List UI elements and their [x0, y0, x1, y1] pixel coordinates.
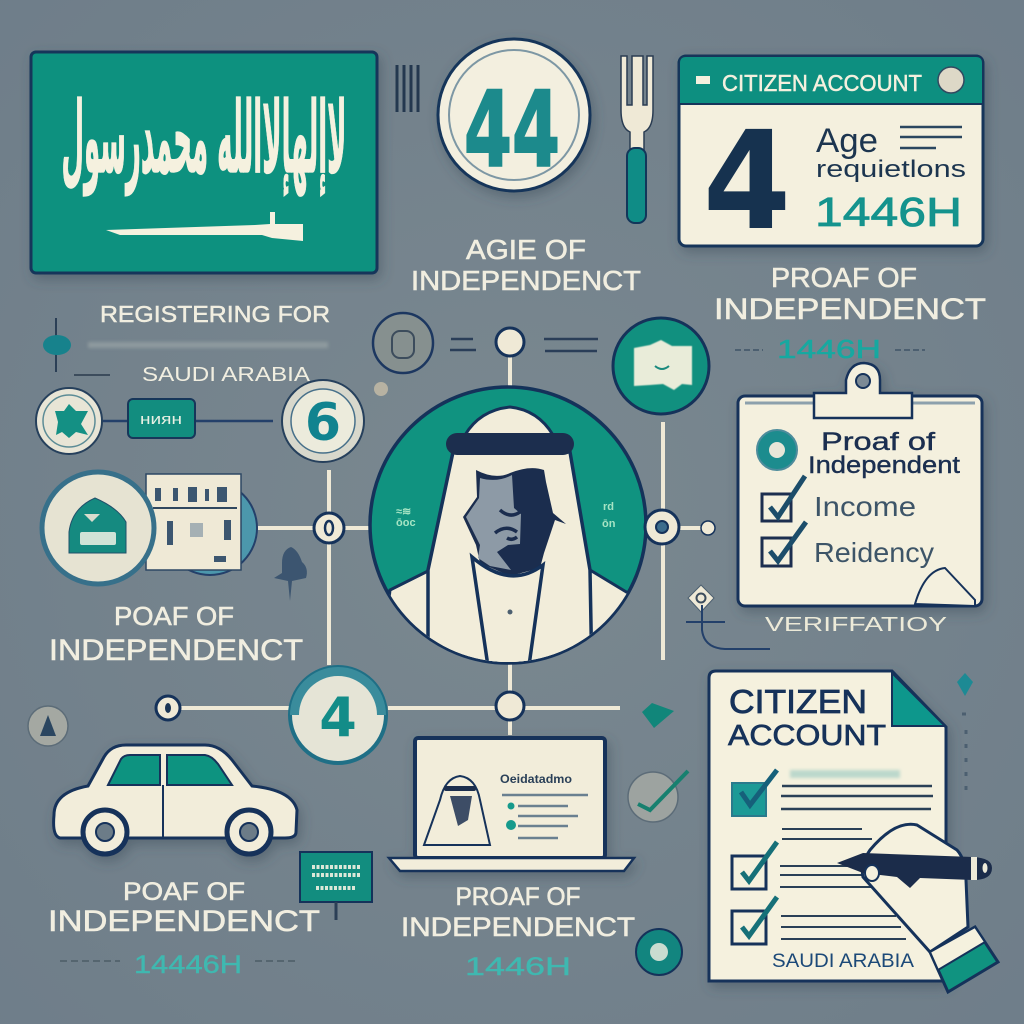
- side script: ōoc: [396, 517, 416, 529]
- panel: citizen account card: requietlons: [816, 156, 966, 183]
- icon: fork: [397, 56, 653, 223]
- heading: proof of independent bottom left: INDEPENDENCT: [48, 905, 320, 938]
- icon: clock check: [628, 703, 688, 822]
- checkbox: residency: [762, 538, 791, 566]
- heading: proof of independent bottom left: [48, 878, 320, 938]
- heading: proof of independent bottom center: PROAF OF: [456, 883, 580, 911]
- laptop avatar: [424, 776, 490, 845]
- panel: citizen account card: [679, 56, 983, 261]
- panel: clipboard proof checklist: Reidency: [814, 537, 934, 568]
- panel: clipboard proof checklist: Independent: [808, 452, 960, 479]
- icon: teal tag: [128, 399, 273, 438]
- icon: car: [54, 745, 297, 854]
- heading: registering for Saudi Arabia: [88, 301, 330, 386]
- icon: bell pin: [274, 547, 307, 601]
- panel: Saudi flag: [31, 52, 377, 273]
- heading: proof of independent left: POAF OF: [114, 601, 234, 631]
- panel: clipboard proof checklist: Income: [814, 491, 916, 522]
- face shadow: [463, 468, 566, 576]
- side script: rd: [603, 501, 614, 513]
- heading: proof of independent bottom left: POAF OF: [123, 878, 245, 906]
- node: bottom center: [496, 692, 524, 720]
- panel: citizen account card: CITIZEN ACCOUNT: [722, 70, 922, 96]
- facial features: [495, 510, 520, 539]
- icon: teal marker: [957, 673, 973, 790]
- heading: proof of independent: [714, 262, 986, 326]
- icon: small emblem: [636, 929, 682, 975]
- heading: proof of independent bottom center: [401, 883, 635, 942]
- icon: magnifier badge: [373, 313, 598, 396]
- icon: teal tag: ниян: [140, 411, 182, 428]
- connector lines: [180, 355, 705, 735]
- panel: citizen account document: ACCOUNT: [728, 720, 886, 752]
- panel: citizen account card: Age: [816, 122, 878, 160]
- panel: citizen account card: 1446H: [815, 189, 962, 235]
- panel: citizen account document: CITIZEN: [729, 683, 867, 720]
- portrait: central figure: [370, 387, 646, 680]
- check badge: [757, 430, 797, 470]
- node: left: [314, 513, 344, 543]
- icon: diamond connector: [686, 585, 770, 649]
- heading: proof of independent left: INDEPENDENCT: [49, 634, 303, 667]
- heading: registering for Saudi Arabia: SAUDI ARABIA: [142, 364, 311, 386]
- big number 4: 4: [703, 103, 791, 261]
- icon: star badge: [36, 388, 128, 454]
- icon: number 4 badge: [290, 667, 386, 763]
- cuff: [930, 927, 998, 992]
- side script: ōn: [602, 518, 616, 530]
- heading: age of independence: [411, 234, 641, 296]
- headband: [446, 433, 574, 455]
- heading: proof of independent: INDEPENDENCT: [714, 293, 986, 326]
- headdress dome: [465, 407, 553, 435]
- face light: [466, 475, 521, 570]
- wheels: [83, 810, 127, 854]
- clipboard clip: [814, 363, 912, 418]
- icon: laptop: [389, 738, 634, 871]
- label: verification: VERIFFATIOY: [765, 614, 947, 636]
- icon: number 6 badge: 6: [305, 393, 341, 453]
- icon: laptop: Oeidatadmo: [500, 772, 572, 786]
- check item 1: [732, 783, 766, 816]
- heading: age of independence: AGIE OF: [466, 234, 586, 265]
- check item 3: [732, 911, 766, 944]
- node: bottom left: [156, 696, 180, 720]
- pen: [837, 853, 992, 888]
- node: top: [496, 328, 524, 356]
- shoulders: [388, 569, 628, 662]
- side script: [396, 501, 616, 530]
- icon: building badge: [42, 472, 257, 584]
- icon: small flag sign: [300, 852, 372, 920]
- head cloth: [428, 452, 592, 680]
- icon: teal pin: [43, 318, 110, 375]
- icon: number 4 medallion: 44: [464, 69, 560, 191]
- card header: [679, 56, 983, 104]
- panel: citizen account document: [709, 671, 946, 981]
- icon: hand with pen: [837, 824, 998, 992]
- label: 14446H: 14446H: [134, 951, 242, 979]
- car windows: [108, 755, 160, 785]
- label: 1446H: 1446H: [777, 334, 881, 364]
- heading: registering for Saudi Arabia: REGISTERING FOR: [100, 301, 330, 327]
- text: لاإلهإلاالله محمدرسول: [62, 80, 346, 197]
- icon: number 4 medallion: [438, 39, 590, 191]
- checkbox: income: [762, 494, 791, 521]
- robe neck: [472, 557, 543, 680]
- node: right: [645, 510, 715, 544]
- panel: citizen account document: SAUDI ARABIA: [772, 951, 914, 972]
- page fold: [892, 673, 945, 726]
- heading: proof of independent left: [49, 601, 303, 667]
- icon: flag badge: [613, 318, 709, 414]
- label: 1446H bottom: 1446H: [465, 953, 571, 981]
- flag sword: [106, 212, 303, 241]
- panel: clipboard proof checklist: Proaf of: [821, 428, 935, 456]
- side script: ≈≋: [396, 506, 411, 518]
- bank icon: [69, 498, 126, 553]
- heading: proof of independent bottom center: INDEPENDENCT: [401, 912, 635, 942]
- building: [146, 474, 241, 570]
- check item 2: [732, 856, 766, 889]
- icon: number 6 badge: [282, 380, 364, 462]
- panel: clipboard proof checklist: [738, 363, 982, 606]
- heading: age of independence: INDEPENDENCT: [411, 265, 641, 296]
- page curl: [915, 568, 975, 606]
- icon: number 4 badge: 4: [319, 686, 357, 749]
- icon: small letter badge: [28, 706, 68, 746]
- heading: proof of independent: PROAF OF: [771, 262, 917, 293]
